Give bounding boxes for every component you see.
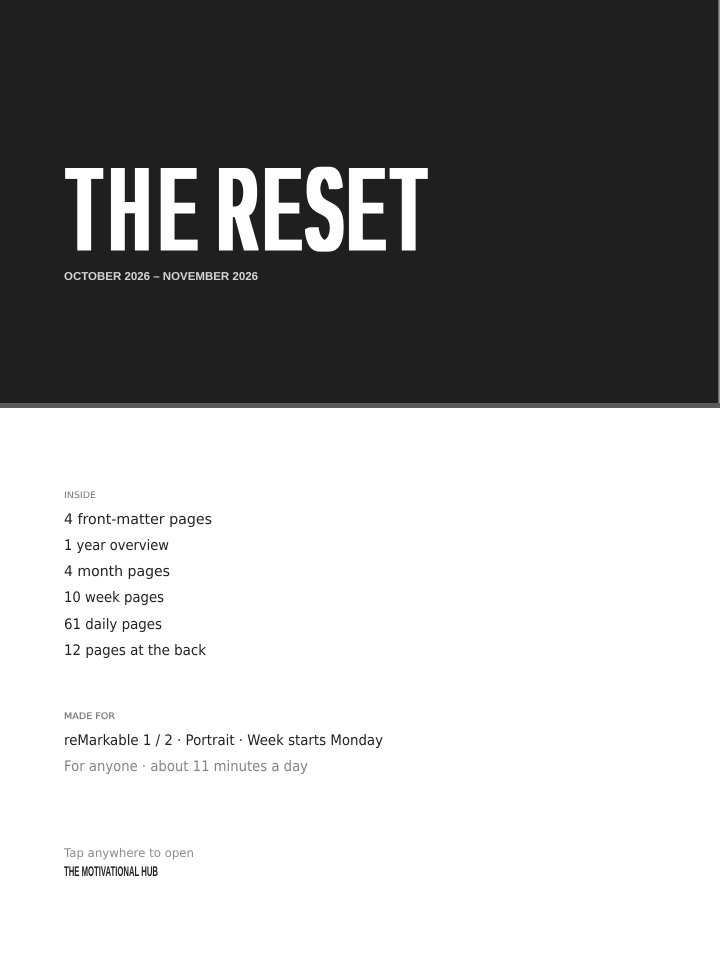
brand name: THE MOTIVATIONAL HUB xyxy=(64,863,158,879)
footer xyxy=(63,846,194,879)
inside heading: INSIDE xyxy=(64,491,96,501)
date range: OCTOBER 2026 – NOVEMBER 2026 xyxy=(64,271,258,283)
audience line: For anyone · about 11 minutes a day xyxy=(64,759,308,775)
device line: reMarkable 1 / 2 · Portrait · Week starts Monday xyxy=(64,733,383,749)
inside list: 1 year overview xyxy=(64,538,169,554)
inside list: 4 front-matter pages xyxy=(64,512,212,528)
inside list: 12 pages at the back xyxy=(64,643,207,659)
panel: dark header xyxy=(0,0,720,408)
section: inside xyxy=(64,491,212,659)
inside list: 4 month pages xyxy=(64,564,170,580)
tap prompt: Tap anywhere to open xyxy=(63,846,194,860)
section: made for xyxy=(64,712,383,775)
made for heading: MADE FOR xyxy=(64,712,115,722)
inside list xyxy=(64,512,212,659)
inside list: 10 week pages xyxy=(64,590,164,606)
title: THE RESET xyxy=(68,143,424,274)
inside list: 61 daily pages xyxy=(64,617,162,633)
